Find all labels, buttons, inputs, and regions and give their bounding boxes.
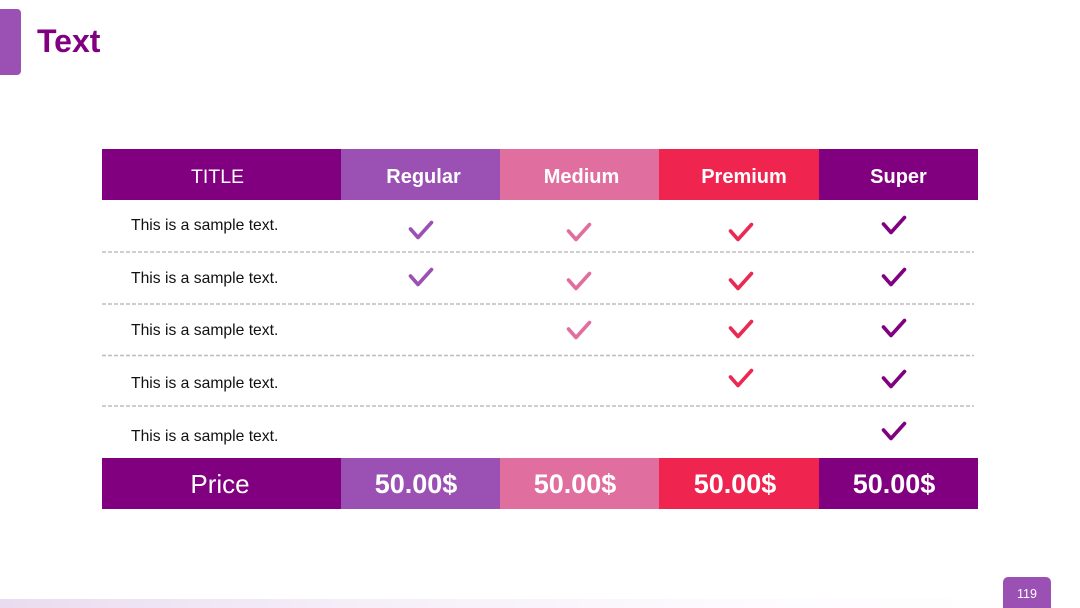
row 2 label: This is a sample text.	[131, 270, 278, 287]
header: regular: Regular	[386, 166, 461, 188]
price: super: 50.00$	[853, 468, 935, 498]
title: Text	[37, 23, 100, 59]
title accent tab	[0, 9, 21, 75]
price: premium: 50.00$	[694, 468, 776, 498]
price: regular: 50.00$	[375, 468, 457, 498]
price label	[102, 458, 341, 509]
header: medium: Medium	[544, 166, 619, 188]
header: title	[102, 149, 341, 200]
header: medium	[500, 149, 659, 200]
price row	[102, 458, 978, 509]
row separators	[102, 251, 974, 407]
super column checks	[884, 218, 904, 438]
row 3 label: This is a sample text.	[131, 322, 278, 339]
premium column checks	[730, 224, 752, 386]
price: super	[819, 458, 978, 509]
price: premium	[659, 458, 819, 509]
row labels	[131, 217, 278, 445]
row 4 label: This is a sample text.	[131, 375, 278, 392]
header: premium	[659, 149, 819, 200]
price: medium: 50.00$	[534, 468, 616, 498]
medium column checks	[568, 224, 590, 338]
price label: Price	[190, 468, 250, 498]
header: super	[819, 149, 978, 200]
page number badge	[1003, 577, 1051, 608]
regular column checks	[410, 222, 432, 284]
footer gradient band	[0, 599, 1080, 608]
page number badge: 119	[1017, 587, 1037, 601]
header: title: TITLE	[191, 166, 244, 188]
header: super: Super	[870, 166, 927, 188]
header row	[102, 149, 978, 200]
row 1 label: This is a sample text.	[131, 217, 278, 234]
row 5 label: This is a sample text.	[131, 428, 278, 445]
header: regular	[341, 149, 500, 200]
price: regular	[341, 458, 500, 509]
header: premium: Premium	[701, 166, 787, 188]
price: medium	[500, 458, 659, 509]
